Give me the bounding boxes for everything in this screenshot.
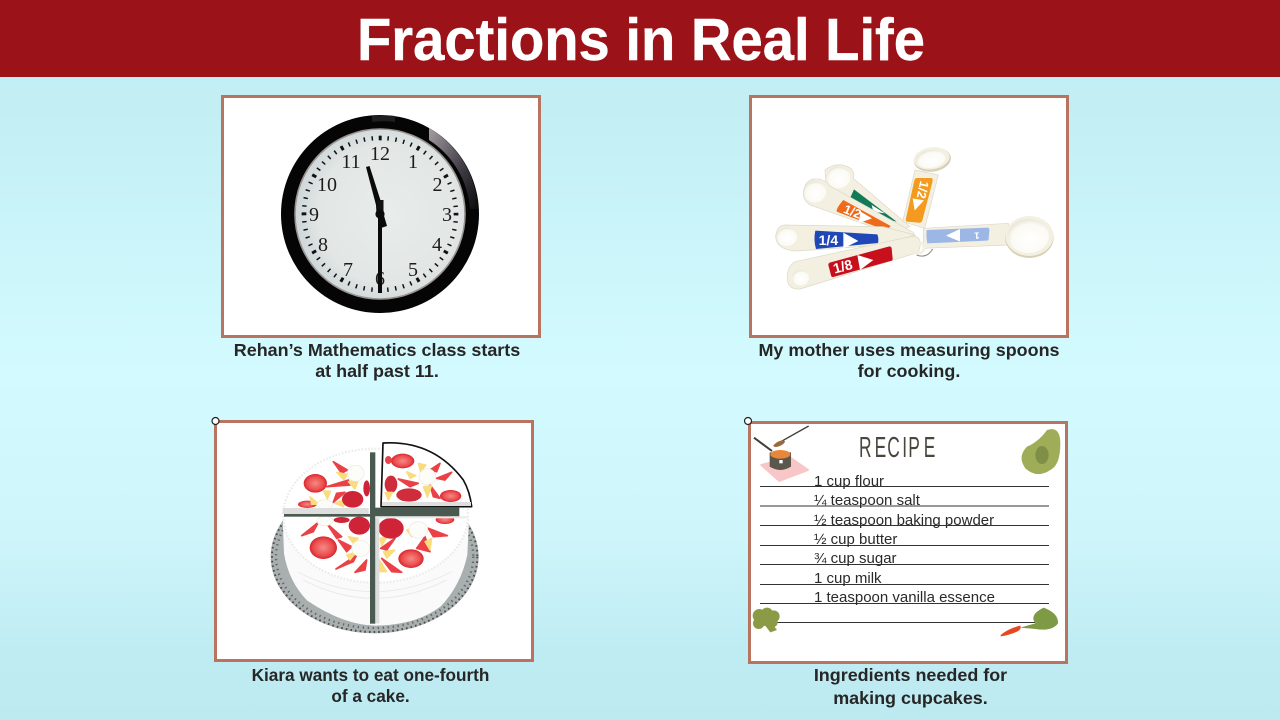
caption: cake: Kiara wants to eat one-fourth (252, 665, 489, 685)
large one spoon: 1 (974, 230, 980, 241)
icon: wall clock: 11 (341, 151, 361, 173)
cake top (283, 449, 468, 583)
clock hands (366, 166, 387, 293)
blue one-quarter spoon: 1/4 (819, 232, 838, 248)
lifted cake slice (381, 443, 472, 507)
panel: measuring spoons (750, 96, 1068, 336)
ingredient list: ½ teaspoon baking powder (814, 512, 994, 529)
caption: measuring spoons: for cooking. (858, 361, 960, 381)
icon: wall clock: 9 (309, 204, 319, 226)
title banner (0, 0, 1280, 77)
caption: clock: at half past 11. (315, 361, 439, 381)
plate (271, 480, 479, 633)
caption: clock (234, 340, 520, 381)
icon: cake cut into quarters (271, 443, 479, 633)
icon: wall clock: 10 (317, 174, 337, 196)
icon: wall clock: 1 (408, 151, 418, 173)
icon: wall clock (281, 115, 479, 313)
icon: wall clock: 8 (318, 234, 328, 256)
icon: wall clock: 4 (432, 234, 442, 256)
title banner: Fractions in Real Life (357, 7, 925, 73)
icon: wall clock: 5 (408, 259, 418, 281)
green spoon (825, 165, 910, 232)
ingredient list: ¾ cup sugar (814, 550, 897, 567)
icon: wall clock: 2 (432, 174, 442, 196)
orange one-half spoon: 1/2 (842, 202, 863, 222)
icon: cooking pot (754, 426, 809, 481)
red one-eighth spoon: 1/8 (831, 256, 854, 277)
red one-eighth spoon (787, 236, 933, 289)
caption: cake: of a cake. (331, 686, 410, 706)
selection handle (212, 418, 219, 424)
caption: recipe: making cupcakes. (833, 688, 988, 708)
icon: measuring spoons (776, 145, 1054, 289)
caption: clock: Rehan’s Mathematics class starts (234, 340, 520, 360)
icon: wall clock: 3 (442, 204, 452, 226)
icon: carrot and greens (1001, 608, 1058, 636)
icon: wall clock: 12 (370, 143, 390, 165)
recipe heading: RECIPE (859, 432, 935, 464)
ingredient list: 1 cup flour (814, 473, 884, 490)
panel: cake (212, 418, 532, 660)
caption: measuring spoons: My mother uses measuring spoons (758, 340, 1060, 360)
ingredient lines (760, 486, 1049, 622)
yellow one-half spoon (903, 145, 952, 228)
icon: broccoli (753, 608, 780, 632)
caption: cake (252, 665, 489, 706)
cake body (283, 518, 469, 626)
panel: recipe (744, 418, 1066, 662)
ingredient list: ¼ teaspoon salt (814, 492, 921, 509)
caption: measuring spoons (758, 340, 1060, 381)
panel: clock (222, 96, 540, 336)
toppings (298, 462, 454, 572)
yellow one-half spoon: 1/2 (914, 180, 931, 200)
caption: recipe: Ingredients needed for (814, 665, 1007, 685)
ingredient list: 1 cup milk (814, 570, 882, 587)
ingredient list: 1 teaspoon vanilla essence (814, 589, 995, 606)
caption: recipe (814, 665, 1007, 708)
icon: avocado (1022, 429, 1060, 474)
selection handle (744, 418, 752, 424)
icon: wall clock: 7 (343, 259, 353, 281)
ingredient list (814, 473, 995, 606)
large one spoon (923, 216, 1054, 258)
blue one-quarter spoon (776, 225, 915, 251)
cake cut lines (283, 452, 467, 624)
orange one-half spoon (803, 179, 915, 237)
ingredient list: ½ cup butter (814, 531, 897, 548)
icon: wall clock: 6 (375, 268, 385, 290)
